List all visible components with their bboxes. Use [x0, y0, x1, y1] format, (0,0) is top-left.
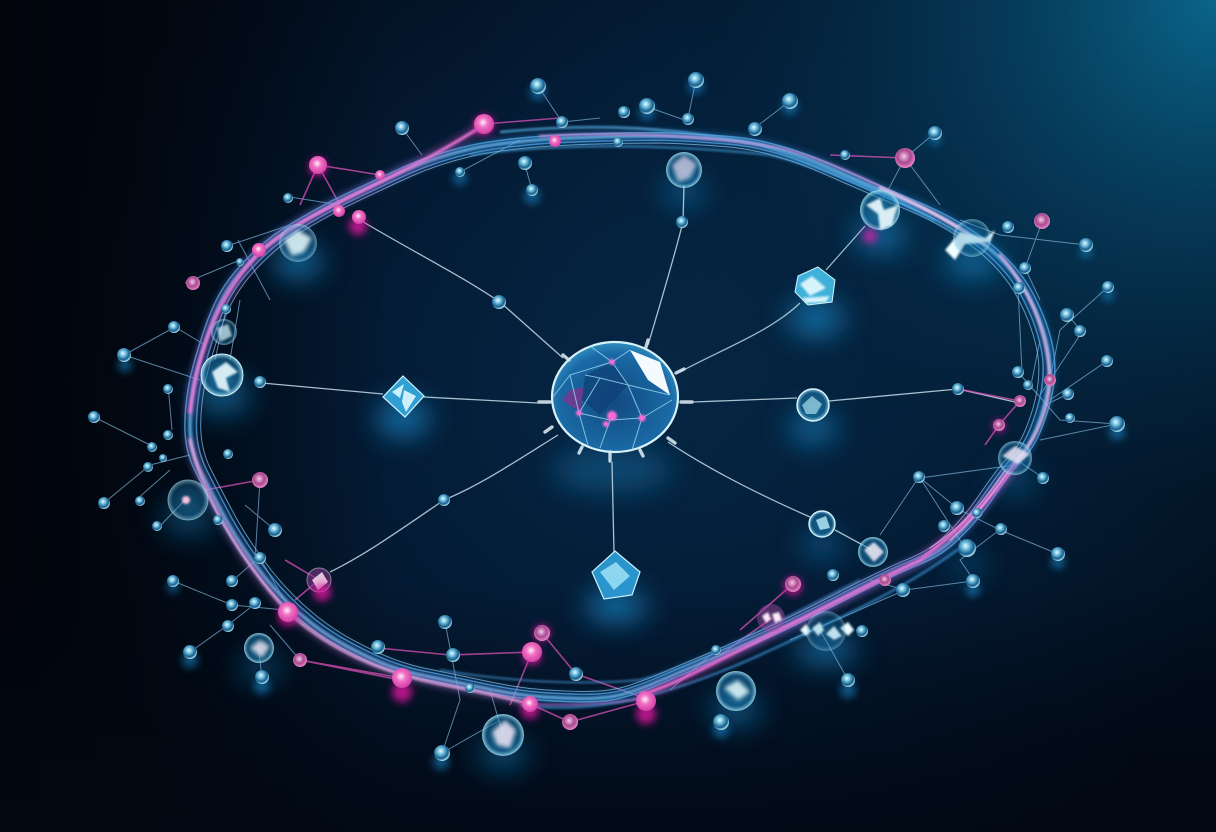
satellite links — [94, 80, 1117, 753]
central hub crystal — [539, 340, 692, 461]
crystals on spokes — [307, 267, 835, 599]
blue nodes — [88, 72, 1125, 770]
pink links — [205, 118, 1020, 722]
spokes from hub — [262, 185, 1015, 572]
pink nodes — [186, 114, 1056, 730]
ambient glow pools under crystals and nodes — [162, 180, 1035, 767]
ring pink highlights — [190, 125, 1050, 705]
hub white facet — [630, 350, 670, 395]
glass clusters on ring — [168, 152, 1032, 756]
ring strands — [185, 127, 1055, 708]
